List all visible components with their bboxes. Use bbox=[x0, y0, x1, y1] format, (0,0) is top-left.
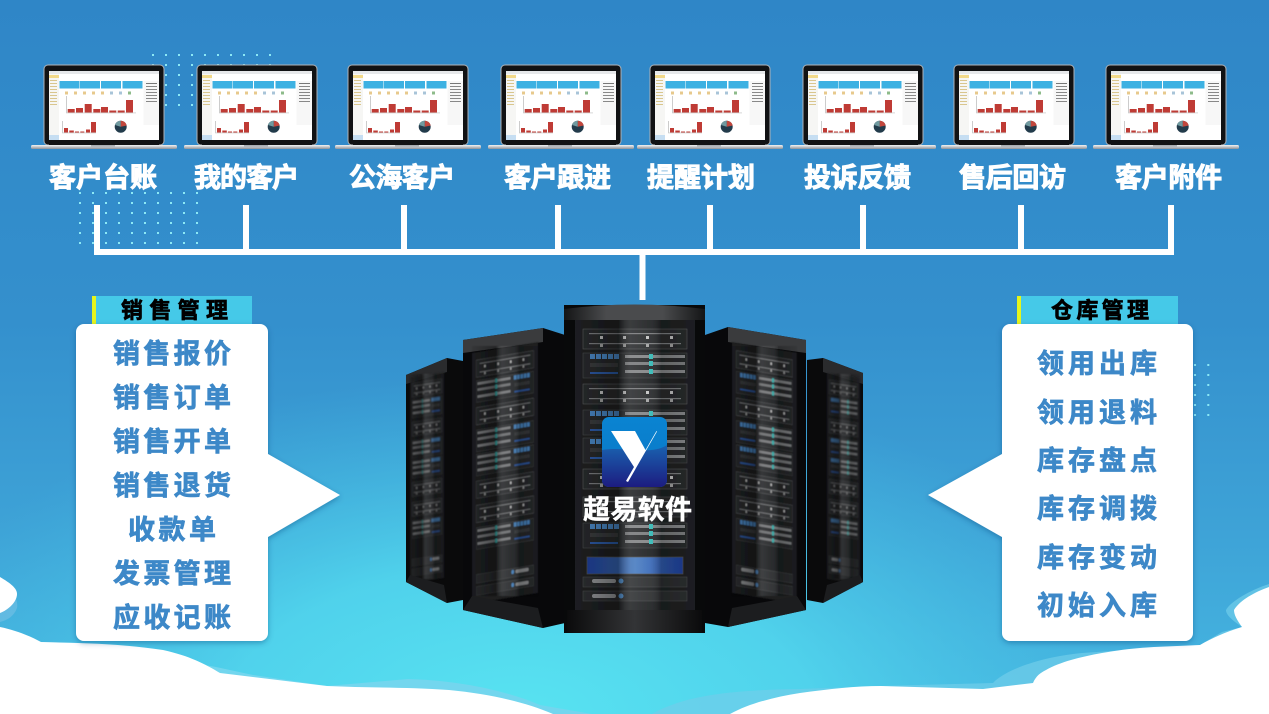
icon: 超易软件 logo bbox=[602, 417, 667, 487]
list: warehouse items: 初始入库 bbox=[1037, 591, 1157, 621]
title: 售后回访: 售后回访 bbox=[959, 163, 1066, 193]
title: 公海客户: 公海客户 bbox=[349, 163, 455, 193]
list: sales items: 发票管理 bbox=[113, 559, 231, 589]
card with pointer bbox=[76, 324, 340, 641]
module titles bbox=[49, 162, 1222, 193]
list: sales items: 收款单 bbox=[128, 515, 216, 545]
connector lines from server to modules bbox=[97, 205, 1171, 300]
laptop: 公海客户 bbox=[335, 65, 481, 149]
heading: 销售管理: 销售管理 bbox=[121, 298, 228, 323]
laptop: 我的客户 bbox=[184, 65, 330, 149]
panel: sales management bbox=[76, 296, 340, 641]
heading: 销售管理 bbox=[92, 296, 252, 326]
title: 客户附件: 客户附件 bbox=[1115, 163, 1222, 193]
list: warehouse items: 库存盘点 bbox=[1037, 446, 1157, 476]
list: sales items: 销售报价 bbox=[113, 339, 231, 369]
list: warehouse items bbox=[1037, 349, 1157, 621]
title: 提醒计划: 提醒计划 bbox=[647, 163, 755, 193]
server racks bbox=[406, 304, 863, 633]
list: warehouse items: 库存变动 bbox=[1037, 543, 1157, 573]
rack: centre bbox=[564, 304, 705, 633]
laptop: 投诉反馈 bbox=[790, 65, 936, 149]
laptop: 客户附件 bbox=[1093, 65, 1239, 149]
clouds: bottom background bbox=[0, 577, 1269, 714]
panel: warehouse management bbox=[928, 296, 1193, 641]
list: warehouse items: 库存调拨 bbox=[1037, 494, 1157, 524]
list: warehouse items: 领用出库 bbox=[1037, 349, 1157, 379]
laptop: 客户台账 bbox=[31, 65, 177, 149]
heading: 仓库管理 bbox=[1017, 296, 1178, 326]
laptop: 客户跟进 bbox=[488, 65, 634, 149]
list: sales items: 应收记账 bbox=[113, 603, 231, 633]
title: 客户台账: 客户台账 bbox=[49, 162, 157, 193]
rack: inner right bbox=[705, 327, 806, 627]
heading: 仓库管理: 仓库管理 bbox=[1051, 298, 1149, 323]
rack: far left bbox=[406, 358, 463, 603]
title: 投诉反馈: 投诉反馈 bbox=[804, 163, 911, 193]
list: sales items bbox=[113, 339, 231, 633]
laptop: 售后回访 bbox=[941, 65, 1087, 149]
title: 客户跟进: 客户跟进 bbox=[504, 163, 611, 193]
rack: far right bbox=[807, 358, 863, 603]
list: sales items: 销售开单 bbox=[113, 427, 231, 457]
title: 我的客户: 我的客户 bbox=[194, 163, 299, 193]
list: sales items: 销售订单 bbox=[113, 383, 231, 413]
logo text: 超易软件 bbox=[583, 495, 692, 525]
card with pointer bbox=[928, 324, 1193, 641]
list: sales items: 销售退货 bbox=[113, 471, 231, 501]
laptop: 提醒计划 bbox=[637, 65, 783, 149]
laptop row: software screenshots bbox=[31, 65, 1239, 149]
rack: inner left bbox=[463, 328, 565, 628]
list: warehouse items: 领用退料 bbox=[1037, 398, 1157, 428]
